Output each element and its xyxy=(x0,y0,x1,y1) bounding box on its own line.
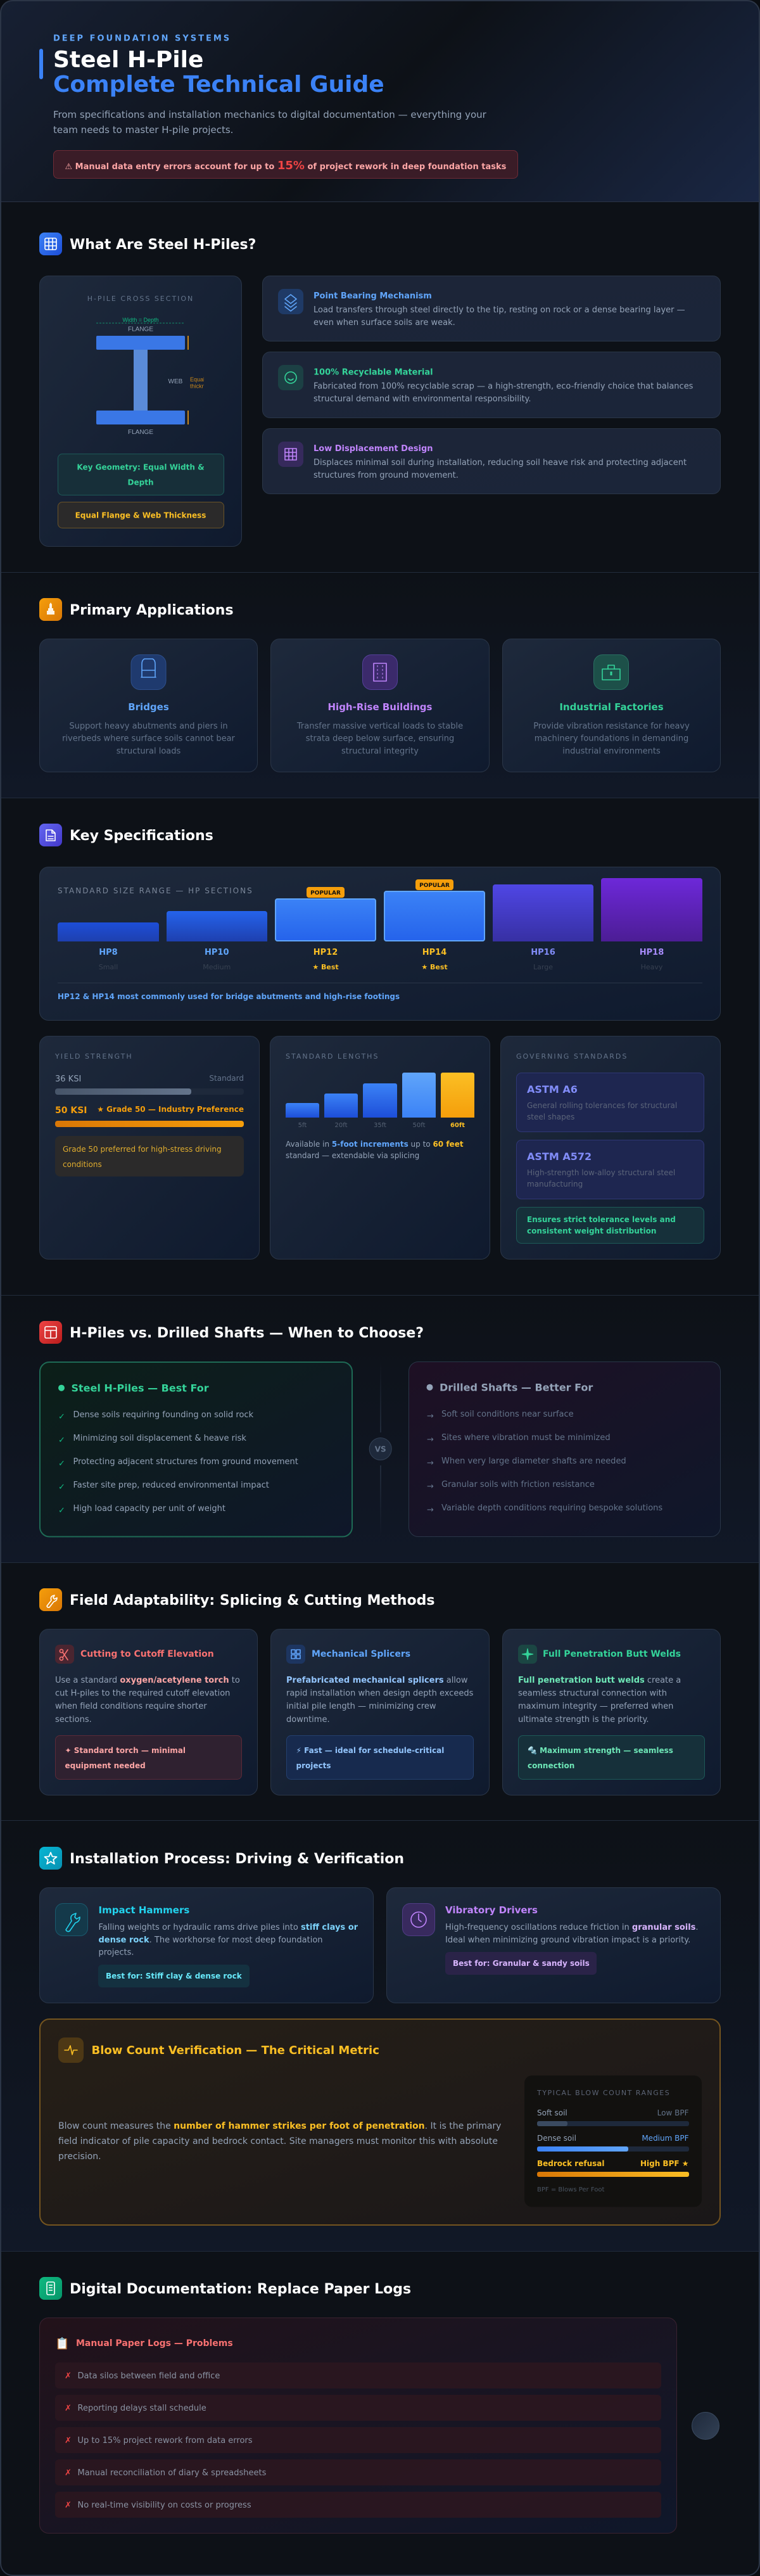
card: mechanical splicers: initial pile length — minimizing crew xyxy=(286,1702,436,1711)
panel: steel h-piles best for: ✓ xyxy=(58,1459,65,1469)
problem list: ✗ xyxy=(65,2371,72,2381)
note: fast: ⚡ Fast — ideal for schedule-critical xyxy=(296,1746,444,1755)
problem list: ✗ xyxy=(65,2436,72,2445)
panel: blow count verification xyxy=(40,2019,720,2225)
panel: drilled shafts better for: → xyxy=(427,1505,434,1515)
card: astm a572: manufacturing xyxy=(527,1180,583,1189)
panel: yield strength xyxy=(39,1036,260,1259)
card: bridges: riverbeds where surface soils cannot bear xyxy=(62,734,236,744)
panel: standard lengths: Available in 5-foot increments up to 60 feet xyxy=(286,1140,464,1149)
callout: tolerance: Ensures strict tolerance levels and xyxy=(527,1215,676,1224)
panel: standard lengths: STANDARD LENGTHS xyxy=(286,1052,379,1061)
problem list: ✗ xyxy=(65,2501,72,2510)
card: mechanical splicers xyxy=(271,1629,489,1795)
panel: manual paper logs: Manual Paper Logs — Problems xyxy=(76,2338,233,2349)
section: h-piles vs drilled shafts xyxy=(0,1295,760,1563)
card: vibratory drivers: Vibratory Drivers xyxy=(445,1904,538,1916)
section heading: versus xyxy=(39,1321,424,1344)
card: point bearing: even when surface soils are weak. xyxy=(314,318,455,328)
problem list: Reporting delays stall schedule xyxy=(77,2404,206,2413)
panel: standard size range xyxy=(39,867,721,1020)
diagram: h-pile section: WEB xyxy=(168,378,183,385)
icon: grid splicer xyxy=(286,1645,305,1664)
bar chart: hp sizes: HP18 xyxy=(640,948,664,957)
problem list: Manual reconciliation of diary & spreadsheets xyxy=(77,2468,267,2478)
note: strength: connection xyxy=(528,1761,574,1770)
card: low displacement: Displaces minimal soil during installation, reducing soil heave risk and protecting adjacent xyxy=(314,458,687,468)
icon: factory xyxy=(594,655,628,689)
icon: scissors xyxy=(55,1645,74,1664)
problem list: ✗ xyxy=(65,2404,72,2413)
diagram: h-pile section: FLANGE xyxy=(128,326,153,333)
bar chart: hp sizes: Heavy xyxy=(641,963,663,971)
icon: wrench xyxy=(56,1903,87,1936)
panel: manual paper logs xyxy=(39,2318,676,2533)
card: impact hammers: dense rock. The workhorse for most deep foundation xyxy=(99,1935,323,1945)
panel: drilled shafts better for: When very large diameter shafts are needed xyxy=(441,1457,626,1466)
icon: bridge xyxy=(131,655,166,689)
panel: drilled shafts better for: Soft soil conditions near surface xyxy=(441,1410,574,1419)
diagram: h-pile section: FLANGE xyxy=(128,429,153,436)
alert callout: 15% rework xyxy=(53,151,518,179)
callout: tolerance: consistent weight distribution xyxy=(527,1227,656,1235)
main title: Complete Technical Guide xyxy=(53,72,384,98)
card: astm a572: ASTM A572 xyxy=(527,1151,592,1163)
bar chart: lengths xyxy=(286,1073,474,1129)
section heading: field: Field Adaptability: Splicing & Cutting Methods xyxy=(70,1593,434,1609)
title accent bar xyxy=(39,49,43,79)
section: key specifications xyxy=(39,824,721,1259)
icon: clock xyxy=(403,1903,434,1936)
note: grade 50: conditions xyxy=(63,1160,102,1169)
explanation text: field indicator of pile capacity and bedrock contact. Site managers must monitor this with absolute xyxy=(58,2136,498,2146)
card: high-rise buildings xyxy=(271,639,489,772)
bar chart: hp sizes: ★ Best xyxy=(421,963,448,971)
card: low displacement: structures from ground movement. xyxy=(314,471,459,480)
note: grade 50: Grade 50 preferred for high-stress driving xyxy=(63,1145,222,1154)
section: what are steel h-piles xyxy=(39,233,721,546)
card: cutting: sections. xyxy=(55,1715,92,1725)
bar chart: lengths: 60ft xyxy=(450,1122,465,1129)
card: impact hammers xyxy=(39,1888,374,2003)
note: torch xyxy=(56,1736,242,1779)
note: strength xyxy=(518,1736,704,1779)
card: butt welds: ultimate strength is the priority. xyxy=(518,1715,649,1725)
panel: steel h-piles best for: ✓ xyxy=(58,1482,65,1492)
section heading: field xyxy=(39,1588,434,1611)
bar chart: hp sizes xyxy=(58,878,702,971)
badge: best for granular xyxy=(445,1952,597,1975)
card: point bearing xyxy=(262,276,721,341)
vs divider: VS xyxy=(375,1444,386,1453)
card: low displacement xyxy=(262,428,721,494)
panel: typical blow count ranges: BPF = Blows Per Foot xyxy=(537,2186,604,2193)
card: point bearing: Load transfers through steel directly to the tip, resting on rock or a dense bearing layer — xyxy=(314,305,685,315)
panel: drilled shafts better for: → xyxy=(427,1458,434,1468)
panel: typical blow count ranges: TYPICAL BLOW COUNT RANGES xyxy=(536,2089,670,2097)
badge: popular hp12: POPULAR xyxy=(310,890,341,896)
callout: key geometry xyxy=(58,454,224,495)
diagram: h-pile section: thickness xyxy=(190,383,214,389)
vs divider xyxy=(369,1361,391,1536)
card: astm a6: steel shapes xyxy=(527,1113,574,1121)
bar chart: lengths: 5ft xyxy=(298,1122,307,1129)
card: industrial factories: Provide vibration resistance for heavy xyxy=(533,722,690,731)
card: vibratory drivers: High-frequency oscillations reduce friction in granular soils. xyxy=(445,1923,699,1932)
panel: governing standards: GOVERNING STANDARDS xyxy=(516,1052,628,1061)
card: cutting xyxy=(39,1629,257,1795)
panel: drilled shafts better for: Variable depth conditions requiring bespoke solutions xyxy=(441,1503,662,1513)
section heading: applications xyxy=(39,598,234,621)
card: recyclable xyxy=(262,352,721,418)
subtitle: team needs to master H-pile projects. xyxy=(53,124,233,136)
callout: tolerance xyxy=(517,1208,704,1243)
note: fast: projects xyxy=(296,1761,331,1770)
diagram: h-pile section xyxy=(96,318,204,434)
bar chart: hp sizes: HP8 xyxy=(99,948,118,957)
alert callout: 15% rework: ⚠ Manual data entry errors account for up to 15% of project rework in deep foundation tasks xyxy=(65,159,507,172)
panel: typical blow count ranges: Medium BPF xyxy=(642,2134,689,2143)
note: torch: equipment needed xyxy=(65,1761,146,1770)
section heading: digital: Digital Documentation: Replace Paper Logs xyxy=(70,2281,411,2297)
badge: popular hp14: POPULAR xyxy=(419,883,450,889)
card: low displacement: Low Displacement Design xyxy=(314,444,433,454)
panel: manual paper logs: 📋 xyxy=(55,2337,69,2350)
panel: drilled shafts better for: → xyxy=(427,1482,434,1491)
card: cutting: when field conditions require shorter xyxy=(55,1702,207,1711)
panel: yield strength: 50 KSI xyxy=(55,1106,87,1116)
panel: yield strength: YIELD STRENGTH xyxy=(54,1052,133,1061)
callout: key geometry: Depth xyxy=(128,478,153,487)
panel: drilled shafts better for: Drilled Shafts — Better For xyxy=(440,1381,593,1394)
card: high-rise buildings: Transfer massive vertical loads to stable xyxy=(296,722,463,731)
bar chart: hp sizes: Small xyxy=(99,963,118,971)
bar chart: hp sizes: Medium xyxy=(203,963,231,971)
card: astm a6: General rolling tolerances for structural xyxy=(527,1101,677,1110)
callout: key geometry: Key Geometry: Equal Width & xyxy=(77,462,205,471)
bar chart: lengths: 50ft xyxy=(413,1122,426,1129)
panel: h-pile cross section: H-PILE CROSS SECTION xyxy=(87,295,194,303)
card: impact hammers: Falling weights or hydraulic rams drive piles into stiff clays or xyxy=(99,1923,358,1932)
section heading: installation xyxy=(39,1847,404,1870)
note: grade 50 xyxy=(55,1136,244,1176)
panel: typical blow count ranges: Dense soil xyxy=(537,2134,576,2143)
icon: building xyxy=(362,655,398,689)
card: recyclable: 100% Recyclable Material xyxy=(314,367,433,378)
panel: steel h-piles best for xyxy=(40,1362,352,1537)
card: astm a572: High-strength low-alloy structural steel xyxy=(527,1168,675,1177)
card: high-rise buildings: High-Rise Buildings xyxy=(328,701,433,713)
card: bridges xyxy=(39,639,257,772)
subtitle xyxy=(53,109,487,136)
card: high-rise buildings: structural integrity xyxy=(341,746,419,756)
panel: standard size range: HP12 & HP14 most commonly used for bridge abutments and high-rise footings xyxy=(58,992,400,1001)
panel: standard lengths: standard — extendable via splicing xyxy=(286,1151,419,1160)
section heading: specs xyxy=(39,824,213,846)
bar chart: hp sizes: HP16 xyxy=(531,948,555,957)
badge: popular hp12 xyxy=(307,887,345,898)
panel: standard size range: STANDARD SIZE RANGE — HP SECTIONS xyxy=(58,886,253,895)
section: primary applications xyxy=(0,572,760,798)
panel: h-pile cross section xyxy=(39,276,242,546)
note: torch: ✦ Standard torch — minimal xyxy=(65,1746,186,1755)
card: butt welds: seamless structural connection with xyxy=(518,1689,667,1698)
icon: layers xyxy=(278,289,303,314)
connector knob xyxy=(692,2413,719,2439)
panel: steel h-piles best for: Steel H-Piles — Best For xyxy=(71,1382,209,1394)
panel: steel h-piles best for: Faster site prep, reduced environmental impact xyxy=(73,1481,269,1490)
panel: yield strength: 36 KSI xyxy=(55,1074,81,1084)
card: butt welds: maximum integrity — preferred when xyxy=(518,1702,673,1711)
main title xyxy=(53,47,384,98)
card: vibratory drivers: Ideal when minimizing ground vibration impact is a priority. xyxy=(445,1935,690,1945)
header xyxy=(0,0,760,202)
subtitle: From specifications and installation mechanics to digital documentation — everything your xyxy=(53,109,487,120)
problem list: No real-time visibility on costs or progress xyxy=(77,2501,251,2510)
card: mechanical splicers: downtime. xyxy=(286,1715,330,1725)
badge: popular hp14 xyxy=(415,879,453,890)
card: bridges: structural loads xyxy=(117,746,180,756)
card: industrial factories: machinery foundations in demanding xyxy=(535,734,688,744)
section: field adaptability xyxy=(0,1588,760,1821)
icon: pulse xyxy=(58,2037,84,2063)
panel: drilled shafts better for: Sites where vibration must be minimized xyxy=(441,1433,611,1443)
bar chart: hp sizes: Large xyxy=(533,963,553,971)
badge: best for stiff clay xyxy=(98,1965,250,1987)
card: cutting: Use a standard oxygen/acetylene torch to xyxy=(55,1676,240,1685)
panel: yield strength: Standard xyxy=(209,1074,244,1083)
card: cutting: cut H-piles to the required cutoff elevation xyxy=(55,1689,230,1698)
problem list: Data silos between field and office xyxy=(77,2371,220,2381)
panel: drilled shafts better for xyxy=(409,1362,721,1537)
section heading: digital xyxy=(39,2277,411,2300)
diagram: h-pile section: Width = Depth xyxy=(122,317,159,323)
bar: 36 ksi xyxy=(55,1088,244,1095)
panel: steel h-piles best for: ✓ xyxy=(58,1506,65,1515)
card: industrial factories: industrial environments xyxy=(562,746,661,756)
card: high-rise buildings: strata deep below surface, ensuring xyxy=(306,734,454,744)
card: impact hammers: Impact Hammers xyxy=(99,1904,189,1916)
icon: grid xyxy=(278,442,303,467)
bar chart: hp sizes: HP10 xyxy=(205,948,229,957)
panel: steel h-piles best for: Dense soils requiring founding on solid rock xyxy=(73,1410,254,1420)
section heading: specs: Key Specifications xyxy=(70,828,213,844)
icon: recycle circle xyxy=(278,365,303,390)
card: butt welds: Full Penetration Butt Welds xyxy=(543,1649,681,1659)
card: mechanical splicers: Prefabricated mechanical splicers allow xyxy=(286,1676,468,1685)
bar: 50 ksi xyxy=(55,1121,244,1127)
card: vibratory drivers xyxy=(386,1888,721,2003)
card: astm a572 xyxy=(517,1140,704,1199)
panel: standard lengths xyxy=(270,1036,490,1259)
card: bridges: Support heavy abutments and piers in xyxy=(69,722,228,731)
explanation text: Blow count measures the number of hammer strikes per foot of penetration. It is the primary xyxy=(58,2121,501,2131)
panel: typical blow count ranges xyxy=(524,2075,702,2207)
section heading: versus: H-Piles vs. Drilled Shafts — When to Choose? xyxy=(70,1325,424,1341)
panel: steel h-piles best for: ✓ xyxy=(58,1412,65,1422)
panel: drilled shafts better for: → xyxy=(427,1412,434,1421)
card: astm a6: ASTM A6 xyxy=(527,1083,578,1095)
explanation text xyxy=(58,2121,501,2162)
card: recyclable: structural demand with environmental responsibility. xyxy=(314,394,531,404)
bar chart: hp sizes: HP14 xyxy=(422,948,446,957)
panel: yield strength: ★ Grade 50 — Industry Preference xyxy=(97,1105,244,1114)
bar chart: lengths: 35ft xyxy=(374,1122,386,1129)
bar chart: hp sizes: ★ Best xyxy=(312,963,339,971)
panel: typical blow count ranges: High BPF ★ xyxy=(640,2159,689,2168)
badge: best for stiff clay: Best for: Stiff clay & dense rock xyxy=(106,1972,243,1980)
panel: steel h-piles best for: Protecting adjacent structures from ground movement xyxy=(73,1457,298,1467)
note: fast xyxy=(286,1736,474,1779)
section heading: what are xyxy=(39,233,256,255)
panel: drilled shafts better for: → xyxy=(427,1435,434,1444)
bar chart: lengths: 20ft xyxy=(334,1122,348,1129)
diagram: h-pile section: Equal xyxy=(190,376,205,383)
card: butt welds: Full penetration butt welds create a xyxy=(518,1676,681,1685)
card: bridges: Bridges xyxy=(128,701,169,713)
card: mechanical splicers: rapid installation when design depth exceeds xyxy=(286,1689,474,1698)
card: industrial factories xyxy=(503,639,721,772)
panel: steel h-piles best for: ✓ xyxy=(58,1436,65,1445)
panel: typical blow count ranges: Low BPF xyxy=(657,2108,689,2117)
card: cutting: Cutting to Cutoff Elevation xyxy=(80,1649,214,1659)
badge: best for granular: Best for: Granular & sandy soils xyxy=(453,1959,590,1968)
section heading: applications: Primary Applications xyxy=(70,603,234,618)
panel: governing standards xyxy=(500,1036,721,1259)
panel: steel h-piles best for: Minimizing soil displacement & heave risk xyxy=(73,1434,246,1443)
main title: Steel H-Pile xyxy=(53,47,203,73)
card: industrial factories: Industrial Factories xyxy=(559,701,664,713)
icon: weld spark xyxy=(518,1645,537,1664)
panel: typical blow count ranges: Soft soil xyxy=(537,2108,567,2117)
callout: equal flange and web: Equal Flange & Web Thickness xyxy=(75,511,206,520)
bar chart: hp sizes: HP12 xyxy=(314,948,338,957)
problem list: ✗ xyxy=(65,2468,72,2478)
note: strength: 🔩 Maximum strength — seamless xyxy=(528,1746,673,1755)
eyebrow label: DEEP FOUNDATION SYSTEMS xyxy=(53,34,231,43)
panel: steel h-piles best for: High load capacity per unit of weight xyxy=(73,1504,225,1514)
problem list xyxy=(55,2362,661,2518)
panel: blow count verification: Blow Count Verification — The Critical Metric xyxy=(91,2044,379,2057)
card: butt welds xyxy=(503,1629,721,1795)
panel: drilled shafts better for: Granular soils with friction resistance xyxy=(441,1480,595,1489)
card: impact hammers: projects. xyxy=(99,1948,134,1958)
problem list: Up to 15% project rework from data errors xyxy=(77,2436,253,2445)
section heading: what are: What Are Steel H-Piles? xyxy=(70,237,256,253)
card: astm a6 xyxy=(517,1073,704,1132)
section: installation process xyxy=(0,1821,760,2252)
card: recyclable: Fabricated from 100% recyclable scrap — a high-strength, eco-friendly choice that balances xyxy=(314,381,694,392)
section: digital documentation xyxy=(39,2277,719,2533)
explanation text: precision. xyxy=(58,2152,101,2162)
card: point bearing: Point Bearing Mechanism xyxy=(314,291,432,301)
section heading: installation: Installation Process: Driving & Verification xyxy=(70,1851,404,1867)
card: mechanical splicers: Mechanical Splicers xyxy=(312,1649,410,1659)
callout: equal flange and web xyxy=(58,502,224,528)
panel: typical blow count ranges: Bedrock refusal xyxy=(537,2159,604,2168)
